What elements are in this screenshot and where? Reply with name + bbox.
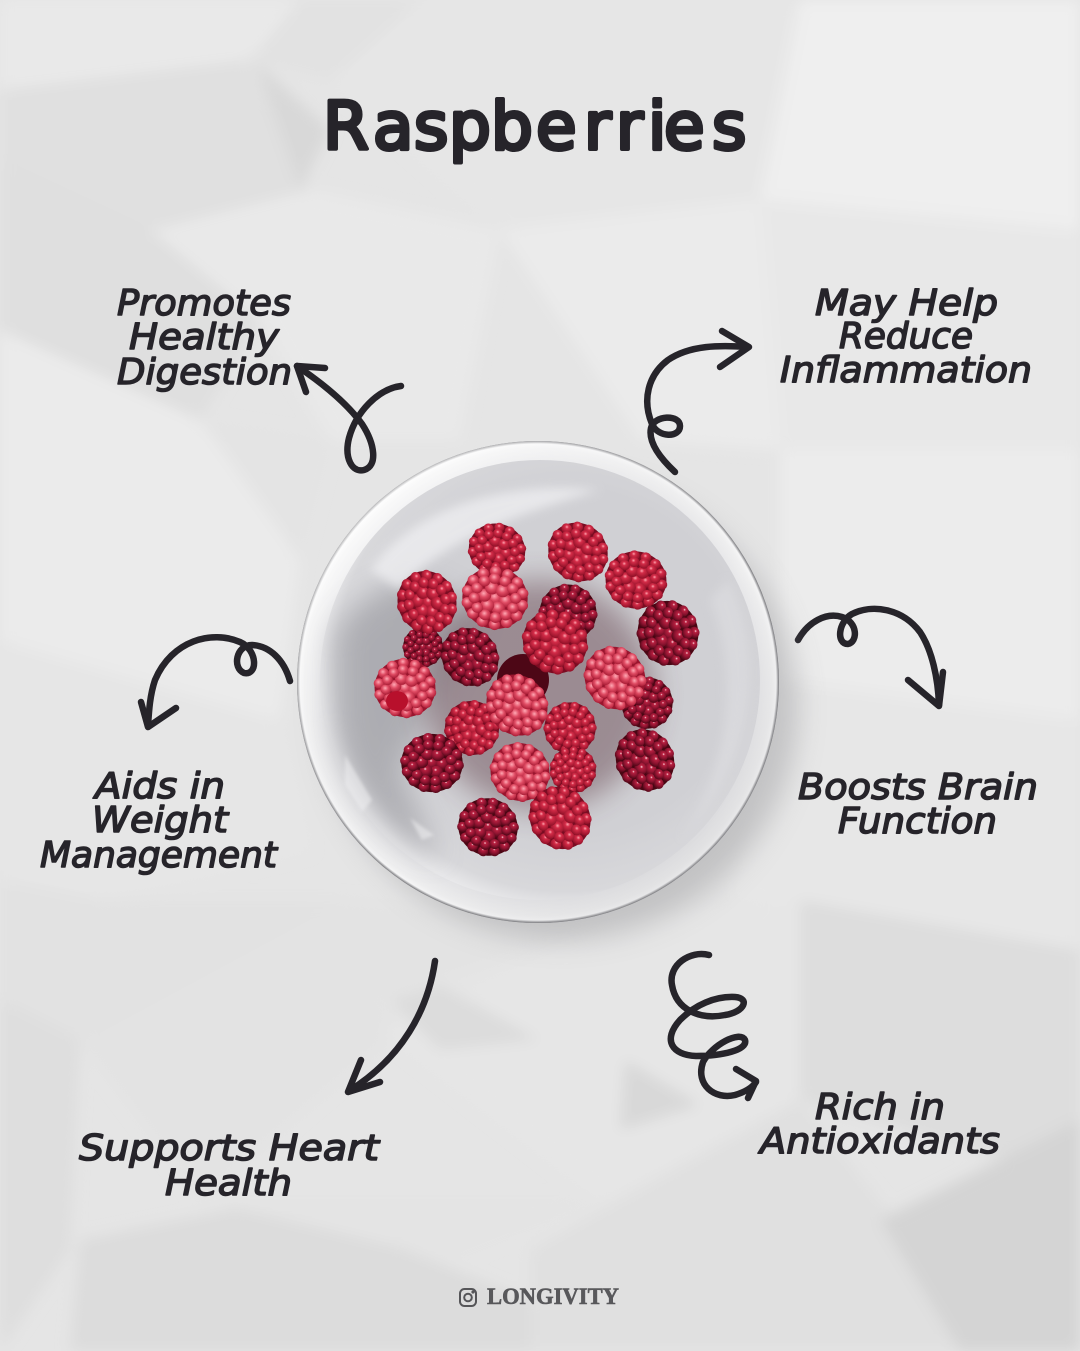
label: Aids in Weight Management: Aids in (93, 766, 225, 807)
label: May Help Reduce Inflammation: May Help (815, 283, 998, 324)
label: May Help Reduce Inflammation: Inflammation (780, 350, 1032, 391)
arrow: to Promotes Healthy Digestion (297, 366, 401, 470)
label: Promotes Healthy Digestion: Healthy (129, 317, 280, 358)
arrow: to Aids in Weight Management (141, 637, 290, 727)
raspberries (369, 509, 706, 866)
label: Aids in Weight Management: Weight (92, 800, 230, 841)
label: Aids in Weight Management: Management (40, 835, 279, 876)
label: May Help Reduce Inflammation (780, 283, 1032, 391)
arrow: to May Help Reduce Inflammation (647, 331, 749, 472)
label: Boosts Brain Function: Function (838, 801, 997, 842)
label: Supports Heart Health: Supports Heart (79, 1128, 381, 1169)
icon: Instagram (460, 1289, 476, 1306)
label: Rich in Antioxidants: Rich in (815, 1087, 945, 1128)
label: Boosts Brain Function: Boosts Brain (798, 767, 1038, 808)
arrow: to Supports Heart Health (348, 961, 435, 1092)
label: Promotes Healthy Digestion (117, 283, 292, 393)
label: Supports Heart Health (79, 1128, 381, 1204)
title: Raspberries (323, 88, 746, 165)
arrow: to Boosts Brain Function (798, 609, 943, 706)
arrow: to Rich in Antioxidants (671, 954, 756, 1098)
label: Boosts Brain Function (798, 767, 1038, 842)
label: May Help Reduce Inflammation: Reduce (839, 316, 973, 357)
label: Promotes Healthy Digestion: Digestion (117, 352, 292, 393)
label: Rich in Antioxidants: Antioxidants (758, 1121, 1000, 1162)
watermark: Instagram icon and LONGIVITY: LONGIVITY (487, 1284, 619, 1309)
label: Supports Heart Health: Health (165, 1163, 292, 1204)
bowl (297, 441, 798, 940)
label: Promotes Healthy Digestion: Promotes (117, 283, 291, 324)
label: Rich in Antioxidants (758, 1087, 1000, 1162)
label: Aids in Weight Management (40, 766, 279, 876)
